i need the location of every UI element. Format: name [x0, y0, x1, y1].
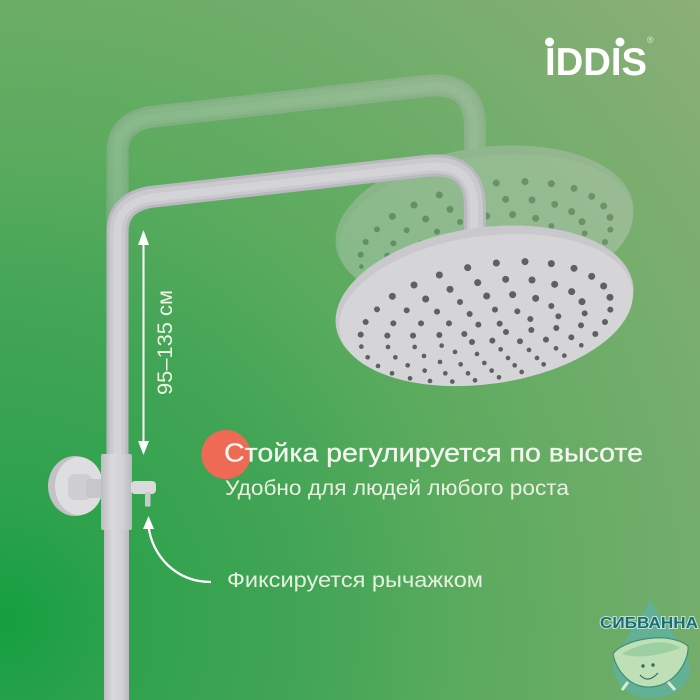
bathtub	[613, 638, 688, 690]
shower head	[325, 207, 644, 404]
lower column	[104, 525, 129, 700]
curved lever arrow	[143, 516, 211, 582]
sliding collar	[101, 454, 132, 530]
iddis logo: IDDIS	[545, 41, 647, 84]
heading: Стойка регулируется по высоте	[224, 438, 643, 468]
mount cylinder	[68, 474, 104, 500]
lever caption: Фиксируется рычажком	[227, 569, 483, 592]
subheading: Удобно для людей любого роста	[225, 477, 569, 500]
red accent circle	[202, 430, 250, 479]
shower arm and upper column	[118, 165, 475, 460]
sibvanna logo	[600, 597, 698, 698]
iddis logo: ®	[647, 35, 654, 45]
sibvanna wordmark: СИБВАННА	[600, 615, 698, 632]
wall plate	[48, 456, 103, 516]
height label: 95–135 см	[154, 290, 177, 395]
wall mount and collar	[48, 454, 156, 700]
water drop	[614, 597, 690, 698]
ghost shower: raised position	[118, 85, 644, 380]
locking lever	[131, 481, 156, 506]
height double arrow	[138, 230, 149, 455]
